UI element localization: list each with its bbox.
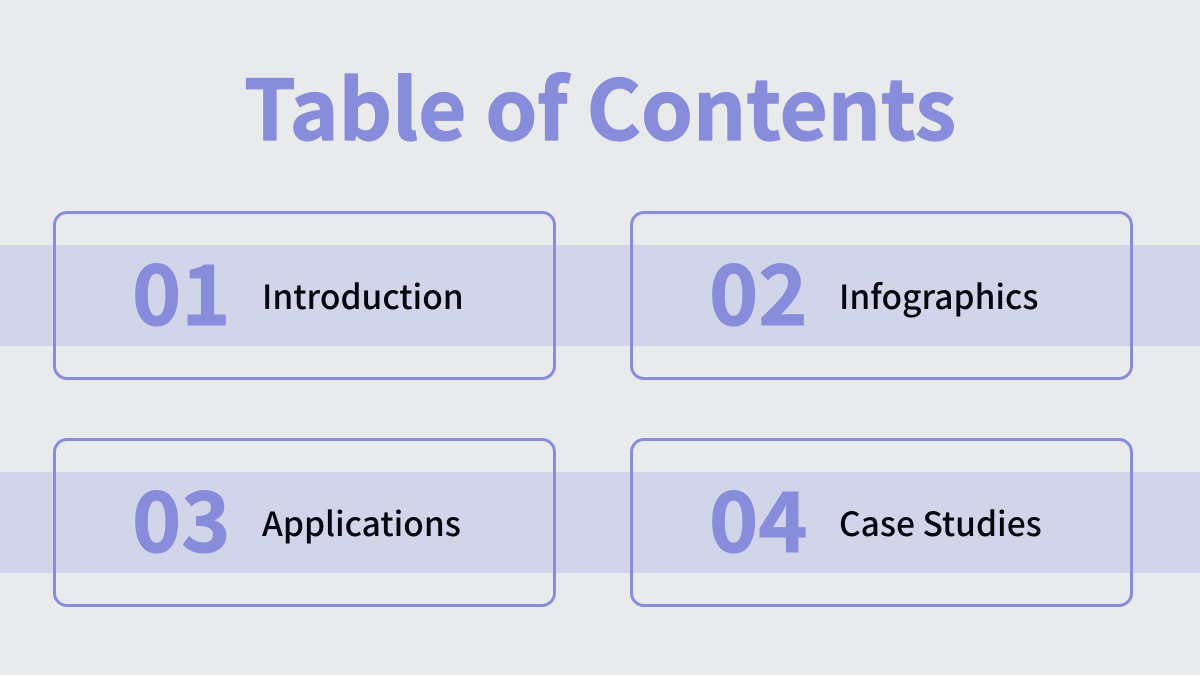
panel: 02 Infographics <box>630 211 1133 380</box>
band: bottom row <box>0 472 1200 573</box>
panel: 04 Case Studies <box>630 438 1133 607</box>
number 01: 01 <box>132 229 231 350</box>
label Infographics: Infographics <box>839 270 1038 319</box>
label Introduction: Introduction <box>262 270 464 319</box>
number 04: 04 <box>709 456 808 577</box>
band: top row <box>0 245 1200 346</box>
panel: 01 Introduction <box>53 211 556 380</box>
panel: 03 Applications <box>53 438 556 607</box>
label Applications: Applications <box>262 497 461 546</box>
title: Table of Contents <box>244 44 956 164</box>
label Case Studies: Case Studies <box>839 497 1042 546</box>
number 02: 02 <box>709 229 808 350</box>
number 03: 03 <box>132 456 231 577</box>
